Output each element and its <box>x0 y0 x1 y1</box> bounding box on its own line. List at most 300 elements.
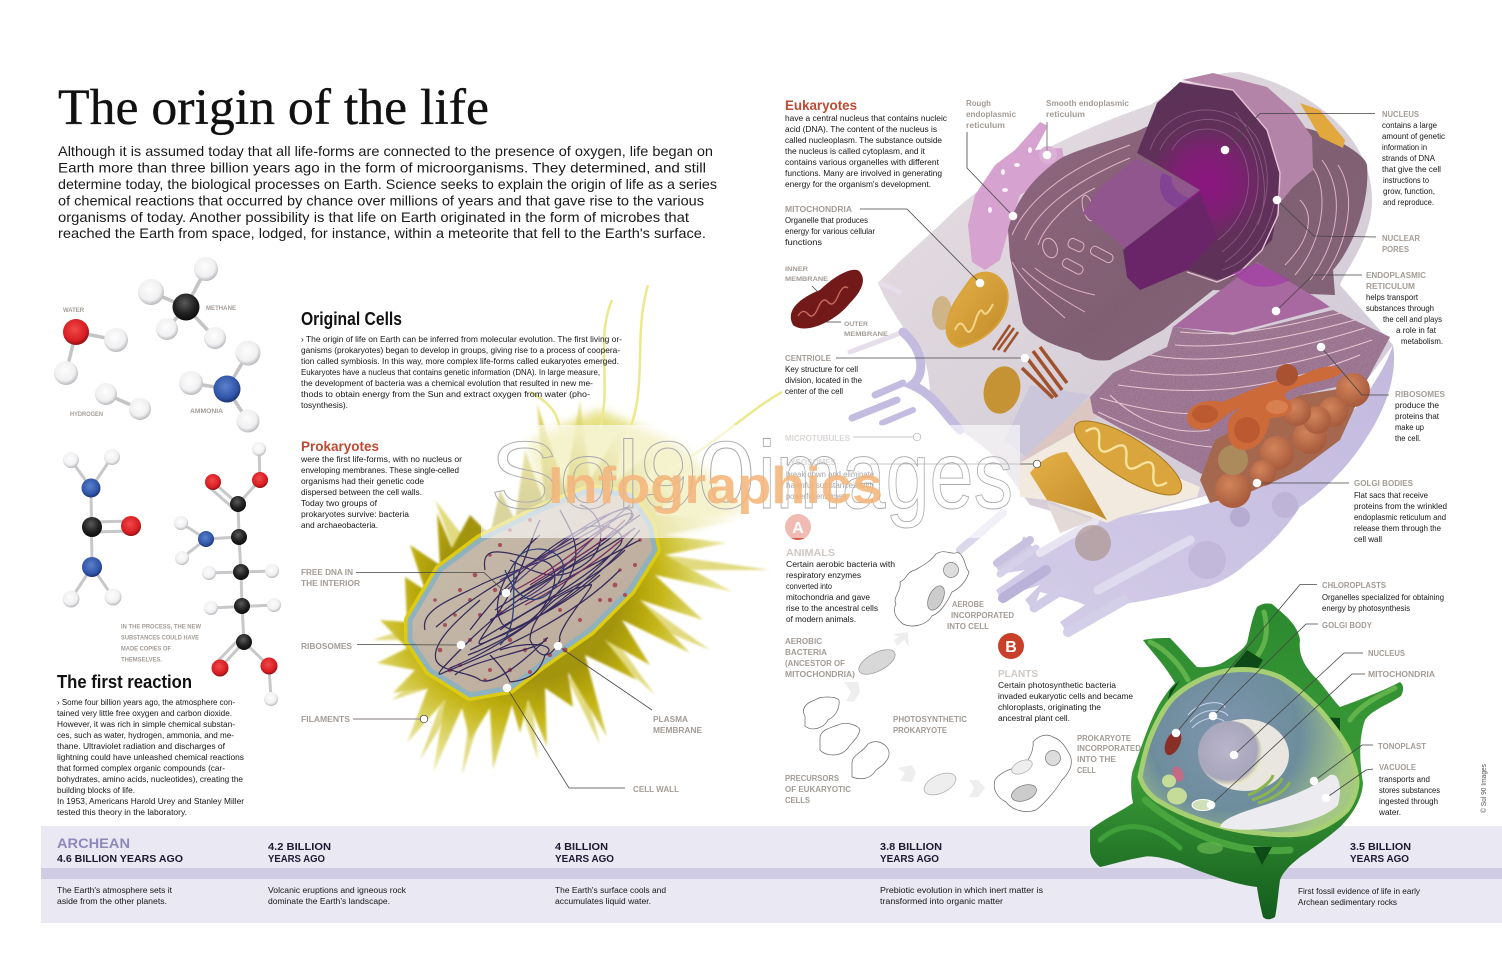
callout: rough endoplasmic reticulum: Rough <box>966 98 991 108</box>
note: self copying: IN THE PROCESS, THE NEW <box>121 624 202 630</box>
callout: golgi bodies: GOLGI BODIES <box>1354 478 1413 488</box>
cell body <box>410 490 655 695</box>
text: first reaction body: In 1953, Americans Harold Urey and Stanley Miller <box>57 796 244 806</box>
fine spike tips <box>372 500 770 775</box>
callout: nucleus: strands of DNA <box>1382 153 1435 163</box>
note: self copying <box>121 624 202 664</box>
molecule labels: AMMONIA <box>190 408 223 415</box>
panel: B plants <box>994 633 1141 812</box>
callout: filaments <box>301 714 428 724</box>
callout: nuclear pores: NUCLEAR <box>1382 233 1421 243</box>
callout: inner membrane: MEMBRANE <box>785 276 829 283</box>
text: prokaryotes body: were the first life-forms, with no nucleus or <box>300 454 462 464</box>
text: prokaryotes body: enveloping membranes. These single-celled <box>301 465 459 475</box>
callout: lysosomes <box>786 457 1041 501</box>
callout: centriole: CENTRIOLE <box>785 353 831 363</box>
timeline entry: 4.2 billion <box>268 841 407 906</box>
timeline entry: 4.6 billion: The Earth's atmosphere sets it <box>57 885 173 895</box>
callout: nuclear pores <box>1273 196 1421 254</box>
sketch: animal cell with aerobe <box>894 552 969 626</box>
text: prokaryotes body: prokaryotes survive: bacteria <box>301 509 409 519</box>
text: original cells body: tion called symbiosis. In this way, more complex life-forms called eukaryotes emerged. <box>301 356 619 366</box>
striped mitochondrion <box>1192 800 1214 810</box>
text: plants body <box>998 680 1133 723</box>
callout: smooth endoplasmic reticulum: reticulum <box>1046 109 1085 119</box>
callout: ribosomes: make up <box>1395 422 1424 432</box>
callout: endoplasmic reticulum: a role in fat <box>1396 325 1437 335</box>
timeline entry: 4 billion: The Earth's surface cools and <box>555 885 666 895</box>
label: prokaryote incorporated <box>1077 733 1141 775</box>
watermark overlay panel <box>481 425 1020 538</box>
text: eukaryotes body: acid (DNA). The content of the nucleus is <box>785 124 938 134</box>
nucleus halo <box>1201 719 1289 791</box>
callout: rough endoplasmic reticulum <box>966 98 1017 220</box>
text: prokaryotes body: Today two groups of <box>301 498 378 508</box>
callout: lysosomes: powerful enzymes. <box>786 491 848 501</box>
label: prokaryote incorporated: CELL <box>1077 765 1096 775</box>
spikes <box>377 400 735 773</box>
timeline entry: 4 billion: 4 BILLION <box>555 841 608 853</box>
text: prokaryotes body <box>300 454 462 530</box>
text: first reaction body: tested this theory in the laboratory. <box>57 807 187 817</box>
text: original cells body: tosynthesis). <box>301 400 348 410</box>
callout: filaments: FILAMENTS <box>301 714 350 724</box>
timeline entry: 4.2 billion: dominate the Earth's landscape. <box>268 896 390 906</box>
callout: golgi bodies: proteins from the wrinkled <box>1354 501 1447 511</box>
callout: microtubules <box>785 433 921 443</box>
text: animals body: respiratory enzymes <box>786 570 862 580</box>
watermark: images: images <box>758 422 1013 529</box>
callout: golgi bodies: endoplasmic reticulum and <box>1354 512 1446 522</box>
text: prokaryotes body: and archaeobacteria. <box>301 520 378 530</box>
text: animals body: converted into <box>786 581 832 591</box>
nucleus pink outer side <box>1182 73 1313 203</box>
timeline entry: 3.8 billion <box>880 841 1044 906</box>
green ovals <box>1162 774 1187 804</box>
callout: vacuole: stores substances <box>1379 785 1441 795</box>
nucleus rings <box>1150 110 1275 270</box>
molecule labels <box>63 305 237 418</box>
callout: mitochondria <box>785 204 984 287</box>
molecule: hydrogen <box>95 383 151 420</box>
callout: nucleus: instructions to <box>1383 175 1429 185</box>
callout: endoplasmic reticulum: ENDOPLASMIC <box>1366 270 1426 280</box>
timeline entry: 3.8 billion: Prebiotic evolution in which inert matter is <box>880 885 1044 895</box>
flagella <box>530 285 782 470</box>
callout: microtubules: MICROTUBULES <box>785 433 850 443</box>
timeline entry: 4 billion: accumulates liquid water. <box>555 896 651 906</box>
callout: plasma membrane <box>554 642 702 735</box>
callout: vacuole: water. <box>1378 807 1401 817</box>
label: precursors: PRECURSORS <box>785 773 839 783</box>
label: aerobe incorporated: AEROBE <box>952 599 984 609</box>
text: eukaryotes body <box>785 113 948 189</box>
timeline entry: 4.6 billion: ARCHEAN <box>57 835 130 851</box>
callout: ribosomes <box>1317 343 1445 443</box>
rough endoplasmic reticulum <box>968 122 1065 270</box>
callout: centriole: Key structure for cell <box>785 364 858 374</box>
note: self copying: SUBSTANCES COULD HAVE <box>121 634 200 642</box>
callout: nucleus: amount of genetic <box>1382 131 1446 141</box>
text: first reaction body: tained very little free oxygen and carbon dioxide. <box>57 708 232 718</box>
text: first reaction body: lightning could have unleashed chemical reactions <box>57 752 245 762</box>
label: aerobe incorporated: INCORPORATED <box>951 610 1014 620</box>
small red mitochondrion <box>791 270 863 328</box>
text: first reaction body <box>57 697 245 817</box>
callout: ribosomes: the cell. <box>1395 433 1421 443</box>
intro text block: Earth more than three billion years ago in the form of microorganisms. They determined, and still <box>58 160 706 176</box>
text: original cells body: thods to obtain energy from the Sun and extract oxygen from water (pho- <box>301 389 590 399</box>
beige pocket <box>1047 503 1093 533</box>
callout: inner membrane: INNER <box>785 266 808 273</box>
mitochondrion middle <box>978 362 1026 418</box>
nucleus <box>1198 721 1262 785</box>
callout: golgi bodies <box>1253 478 1447 544</box>
timeline entry: 3.5 billion: YEARS AGO <box>1350 853 1409 865</box>
intro text block: of chemical reactions that occurred by chance over millions of years and that gave rise to the various <box>58 192 704 208</box>
nucleus cut section <box>1123 82 1280 290</box>
intro text block: reached the Earth from space, lodged, for instance, within a meteorite that fell to the Earth's surface. <box>58 225 706 241</box>
callout: tonoplast <box>1310 741 1427 785</box>
callout: nucleus: and reproduce. <box>1383 197 1434 207</box>
label: precursors <box>785 773 851 805</box>
panel: prokaryotes <box>300 438 702 794</box>
timeline entry: 3.5 billion: First fossil evidence of life in early <box>1298 886 1421 896</box>
timeline entry: 3.5 billion <box>1298 841 1421 907</box>
label: aerobic bacteria: (ANCESTOR OF <box>785 658 845 668</box>
text: plants body: ancestral plant cell. <box>998 713 1070 723</box>
callout: endoplasmic reticulum <box>1272 270 1443 346</box>
callout: ribosomes <box>301 641 465 651</box>
callout: mitochondria plant: MITOCHONDRIA <box>1368 669 1435 679</box>
callout: centriole: division, located in the <box>785 375 862 385</box>
callout: endoplasmic reticulum: RETICULUM <box>1366 281 1415 291</box>
text: animals body: of modern animals. <box>786 614 856 624</box>
text: animals body: Certain aerobic bacteria with <box>786 559 895 569</box>
text: plants body: invaded eukaryotic cells and became <box>998 691 1133 701</box>
callout: free DNA: THE INTERIOR <box>301 578 361 588</box>
vacuole <box>1220 775 1340 830</box>
nucleus lower dark face <box>1125 193 1217 290</box>
label: aerobic bacteria: MITOCHONDRIA) <box>785 669 855 679</box>
callout: outer membrane <box>825 321 889 338</box>
text: first reaction body: building blocks of life. <box>57 785 135 795</box>
callout: rough endoplasmic reticulum: endoplasmic <box>966 109 1016 119</box>
note: self copying: THEMSELVES. <box>121 656 162 664</box>
cytoplasm <box>878 72 1393 525</box>
panel: complex molecules <box>62 442 281 706</box>
intro text block: determine today, the biological processes on Earth. Science seeks to explain the origin of life as a series <box>58 176 717 192</box>
callout: mitochondria: functions <box>785 237 823 247</box>
callout: plasma membrane: MEMBRANE <box>653 725 702 735</box>
molecule labels: WATER <box>63 307 84 314</box>
label: precursors: OF EUKARYOTIC <box>785 784 851 794</box>
yellow ring <box>410 490 655 695</box>
text: animals body: mitochondria and gave <box>786 592 870 602</box>
callout: tonoplast: TONOPLAST <box>1378 741 1427 751</box>
text: first reaction body: thane. Ultraviolet radiation and discharges of <box>57 741 226 751</box>
panel: the first reaction <box>57 672 245 817</box>
text: eukaryotes body: functions. Many are involved in generating <box>785 168 942 178</box>
heading: prokaryotes: Prokaryotes <box>301 438 379 454</box>
timeline entry: 4 billion: YEARS AGO <box>555 853 614 865</box>
text: original cells body: › The origin of life on Earth can be inferred from molecular evolution. The first living or- <box>301 334 622 344</box>
text: prokaryotes body: organisms had their genetic code <box>301 476 424 486</box>
text: eukaryotes body: the nucleus is called cytoplasm, and it <box>785 146 926 156</box>
callout: mitochondria: MITOCHONDRIA <box>785 204 852 214</box>
tubes lower <box>960 513 1190 632</box>
intro text block: Although it is assumed today that all life-forms are connected to the presence of oxygen, life began on <box>58 143 713 159</box>
text: eukaryotes body: contains various organelles with different <box>785 157 940 167</box>
text: original cells body: the development of bacteria was a chemical evolution that resulted in new me- <box>301 378 593 388</box>
callout: nucleus: contains a large <box>1382 120 1437 130</box>
callout: centriole: center of the cell <box>785 386 843 396</box>
callout: mitochondria: Organelle that produces <box>785 215 869 225</box>
illustration: eukaryotic animal cell <box>850 72 1394 634</box>
cream cytoplasm panel <box>1020 433 1200 523</box>
callout: vacuole: transports and <box>1379 774 1430 784</box>
wall highlights <box>1100 612 1395 851</box>
label: aerobe incorporated: INTO CELL <box>947 621 989 631</box>
label: aerobic bacteria: BACTERIA <box>785 647 827 657</box>
sketch: photosynthetic prokaryote <box>921 769 959 799</box>
heading: the first reaction: The first reaction <box>57 672 192 692</box>
molecule: ammonia <box>179 340 260 432</box>
callout: nucleus: that give the cell <box>1382 164 1441 174</box>
callout: ribosomes: RIBOSOMES <box>1395 389 1445 399</box>
text: plants body: Certain photosynthetic bacteria <box>998 680 1116 690</box>
interior <box>1140 669 1357 835</box>
red mitochondrion <box>1161 728 1185 758</box>
text: eukaryotes body: energy for the organism's development. <box>785 179 931 189</box>
text: first reaction body: › Some four billion years ago, the atmosphere con- <box>57 697 235 707</box>
panel: original cells <box>301 309 622 410</box>
label: photosynthetic prokaryote <box>893 714 967 735</box>
mitochondrion lower <box>1065 408 1191 508</box>
magenta arc on wedge <box>1233 263 1290 287</box>
label: prokaryote incorporated: PROKARYOTE <box>1077 733 1131 743</box>
molecule: methane <box>138 257 226 349</box>
illustration: prokaryote cell <box>372 285 782 775</box>
callout: smooth endoplasmic reticulum: Smooth endoplasmic <box>1046 98 1129 108</box>
lower ER wedge <box>1173 262 1330 333</box>
magenta arc on cut face <box>1160 173 1190 208</box>
badge B: B <box>1005 639 1017 656</box>
label: aerobic bacteria: AEROBIC <box>785 636 822 646</box>
callout: nuclear pores: PORES <box>1382 244 1409 254</box>
molecule: amino acid <box>174 442 281 706</box>
heading: animals: ANIMALS <box>786 547 835 559</box>
nucleus cut face light <box>1083 158 1200 248</box>
callout: golgi bodies: release them through the <box>1354 523 1441 533</box>
title: The origin of the life <box>58 80 489 136</box>
text: original cells body: ganisms (prokaryotes) began to develop in groups, giving rise to a process of coopera- <box>301 345 620 355</box>
mitochondrion top <box>932 273 1008 347</box>
text: first reaction body: that formed complex organic compounds (car- <box>57 763 225 773</box>
text: prokaryotes body: dispersed between the cell walls. <box>301 487 422 497</box>
molecule: water <box>54 319 128 385</box>
text: original cells body: Eukaryotes have a nucleus that contains genetic information (DNA). In large measure, <box>301 367 600 377</box>
text: eukaryotes body: have a central nucleus that contains nucleic <box>785 113 948 123</box>
callout: endoplasmic reticulum: metabolism. <box>1401 336 1443 346</box>
timeline entry: 4.6 billion: aside from the other planets. <box>57 896 167 906</box>
label: aerobe incorporated <box>947 599 1014 631</box>
centrioles <box>993 325 1067 398</box>
timeline entry: 3.5 billion: Archean sedimentary rocks <box>1298 897 1398 907</box>
timeline entry: 3.8 billion: YEARS AGO <box>880 853 939 865</box>
callout: plasma membrane: PLASMA <box>653 714 688 724</box>
callout: vacuole: VACUOLE <box>1379 762 1416 772</box>
timeline entry: 4.2 billion: 4.2 BILLION <box>268 841 331 853</box>
callout: endoplasmic reticulum: the cell and plays <box>1383 314 1443 324</box>
watermark: Sol90: Sol90 <box>490 422 755 529</box>
chloroplast stack <box>1248 775 1290 803</box>
callout: endoplasmic reticulum: helps transport <box>1366 292 1419 302</box>
ER mass around nucleus <box>1008 100 1367 361</box>
golgi base <box>1200 385 1365 503</box>
molecule labels: HYDROGEN <box>70 411 103 418</box>
callout: nucleus <box>1221 109 1446 207</box>
callout: chloroplasts <box>1172 580 1444 737</box>
callout: golgi body: GOLGI BODY <box>1322 620 1372 630</box>
callout: centriole <box>785 353 1029 396</box>
callout: lysosomes: break down and eliminate <box>786 469 874 479</box>
wall oval patch <box>1197 842 1223 854</box>
label: aerobic bacteria <box>785 636 855 679</box>
callout: rough endoplasmic reticulum: reticulum <box>966 120 1005 130</box>
golgi <box>1188 703 1228 728</box>
watermark: Infographics: Infographics <box>548 457 883 515</box>
golgi spheres <box>1215 373 1370 508</box>
molecule: urea <box>62 449 141 608</box>
illustration: plant cell <box>1090 603 1403 919</box>
timeline entry: 4.2 billion: YEARS AGO <box>268 853 325 865</box>
callout: smooth endoplasmic reticulum <box>1043 98 1129 159</box>
badge A: A <box>792 520 804 537</box>
lower ER stacks <box>1090 310 1390 477</box>
panel: eukaryotes text <box>785 97 948 189</box>
sketch: aerobic bacterium <box>855 645 899 679</box>
label: prokaryote incorporated: INTO THE <box>1077 754 1116 764</box>
label: photosynthetic prokaryote: PROKARYOTE <box>893 725 947 735</box>
timeline entry: 4.2 billion: Volcanic eruptions and igneous rock <box>268 885 407 895</box>
badge A <box>785 514 811 540</box>
callout: lysosomes: LYSOSOMES <box>786 457 836 467</box>
pale beige and grey patches <box>1005 385 1090 460</box>
callout: vacuole: ingested through <box>1379 796 1438 806</box>
callout: chloroplasts: Organelles specialized for obtaining <box>1322 592 1444 602</box>
heading: eukaryotes: Eukaryotes <box>785 97 857 113</box>
arrows: evolution sequence <box>844 632 985 797</box>
note: self copying: MADE COPIES OF <box>121 646 171 652</box>
gold blob <box>1030 452 1107 520</box>
text: first reaction body: However, it was rich in simple chemical substan- <box>57 719 235 729</box>
golgi olive sphere <box>1218 445 1248 475</box>
timeline entry: 4.6 billion <box>57 835 183 906</box>
ribosome dots <box>433 518 642 682</box>
timeline entry: 3.8 billion: 3.8 BILLION <box>880 841 942 853</box>
callout: ribosomes: proteins that <box>1395 411 1440 421</box>
label: precursors: CELLS <box>785 795 810 805</box>
sketch: precursors of eukaryotic cells <box>803 697 889 779</box>
callout: cell wall <box>503 684 679 794</box>
heading: plants: PLANTS <box>998 668 1038 680</box>
text: animals body: rise to the ancestral cells <box>786 603 879 613</box>
pink body <box>1171 765 1185 783</box>
callout: vacuole <box>1322 762 1441 817</box>
badge B <box>998 633 1024 659</box>
brown shadow under gold <box>1075 525 1111 561</box>
label: photosynthetic prokaryote: PHOTOSYNTHETIC <box>893 714 967 724</box>
lower ER membranes <box>1098 312 1372 447</box>
panel: simple molecules <box>54 257 260 432</box>
callout: nucleus plant: NUCLEUS <box>1368 648 1405 658</box>
timeline entry: 3.5 billion: 3.5 BILLION <box>1350 841 1411 853</box>
timeline entry: 4.6 billion: 4.6 BILLION YEARS AGO <box>57 853 183 865</box>
text: eukaryotes body: called nucleoplasm. The substance outside <box>785 135 942 145</box>
credit: © Sol 90 Images <box>1480 764 1488 813</box>
timeline entry: 4 billion <box>555 841 666 906</box>
callout: chloroplasts: energy by photosynthesis <box>1322 603 1411 613</box>
molecule labels: METHANE <box>206 305 237 312</box>
callout: nucleus plant <box>1230 648 1405 759</box>
lavender lower body <box>995 345 1394 634</box>
text: plants body: chloroplasts, originating the <box>998 702 1101 712</box>
lavender spots <box>1188 492 1298 579</box>
ER membranes <box>1012 145 1349 318</box>
golgi spoons <box>1187 364 1343 450</box>
callout: golgi bodies: cell wall <box>1354 534 1382 544</box>
callout: mitochondria: energy for various cellular <box>785 226 875 236</box>
callout: nucleus: NUCLEUS <box>1382 109 1419 119</box>
callout: free DNA <box>301 567 510 597</box>
intro text block <box>58 143 717 241</box>
callout: chloroplasts: CHLOROPLASTS <box>1322 580 1386 590</box>
callout: outer membrane: MEMBRANE <box>844 331 889 338</box>
callout: cell wall: CELL WALL <box>633 784 679 794</box>
callout: mitochondria plant <box>1207 669 1435 809</box>
text: first reaction body: ces, such as water, hydrogen, ammonia, and me- <box>57 730 234 740</box>
timeline entry: 3.8 billion: transformed into organic matter <box>880 896 1003 906</box>
wall shadows <box>1168 650 1340 865</box>
pale halo upper right <box>528 410 745 540</box>
cell wall <box>1090 603 1403 919</box>
text: animals body <box>786 559 895 624</box>
timeline bands <box>41 826 1502 923</box>
callout: ribosomes: RIBOSOMES <box>301 641 352 651</box>
yellow organelle behind nucleus <box>1300 103 1345 148</box>
callout: ribosomes: produce the <box>1395 400 1439 410</box>
heading: original cells: Original Cells <box>301 309 402 329</box>
callout: golgi body <box>1209 620 1372 720</box>
label: prokaryote incorporated: INCORPORATED <box>1077 743 1141 753</box>
text: first reaction body: bohydrates, amino acids, nucleotides), creating the <box>57 774 243 784</box>
callout: free DNA: FREE DNA IN <box>301 567 353 577</box>
callout: outer membrane: OUTER <box>844 321 868 328</box>
callout: inner membrane <box>785 266 829 292</box>
sketch: plant cell precursor <box>994 735 1071 812</box>
callout: nucleus: grow, function, <box>1383 186 1435 196</box>
DNA tangle <box>424 505 640 682</box>
nucleus pale envelope <box>1182 82 1280 282</box>
lavender flange and tubes, left <box>850 283 960 430</box>
text: original cells body <box>301 334 622 410</box>
callout: golgi bodies: Flat sacs that receive <box>1354 490 1428 500</box>
callout: nucleus: information in <box>1382 142 1427 152</box>
intro text block: organisms of today. Another possibility is that life on Earth originated in the form of microbes that <box>58 209 689 225</box>
panel: A animals <box>785 514 1014 679</box>
callout: endoplasmic reticulum: substances through <box>1366 303 1434 313</box>
